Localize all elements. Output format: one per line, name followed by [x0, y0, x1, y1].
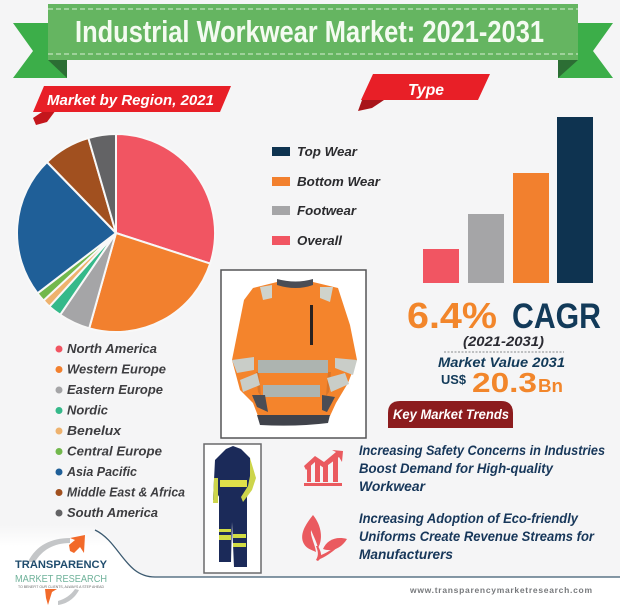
type legend: Footwear [297, 203, 357, 218]
trend 2 text: Uniforms Create Revenue Streams for [359, 528, 595, 544]
region legend: Benelux [67, 423, 122, 438]
trend 2 text [359, 510, 595, 562]
type legend: Bottom Wear [297, 174, 381, 189]
market value stat: US$ [441, 372, 467, 387]
market value stat: Bn [538, 376, 563, 396]
CAGR stat: 6.4% [407, 295, 497, 336]
ribbon heading: type: Type [408, 82, 444, 99]
market value stat: Market Value 2031 [438, 354, 565, 370]
region legend: Western Europe [67, 362, 166, 376]
region legend: Asia Pacific [66, 464, 138, 479]
type legend: Top Wear [297, 144, 358, 159]
key market trends heading: Key Market Trends [393, 406, 509, 422]
CAGR stat [407, 295, 601, 349]
photo: navy coverall with yellow bands [204, 444, 261, 573]
type legend: Overall [297, 233, 342, 248]
footer background [0, 525, 620, 611]
trend 1 text: Workwear [359, 478, 427, 494]
CAGR stat: CAGR [512, 297, 601, 336]
trend 2 text: Manufacturers [359, 546, 453, 562]
website url: www.transparencymarketresearch.com [409, 585, 592, 595]
region legend: Nordic [67, 402, 109, 418]
trend 1 text [359, 442, 605, 494]
region legend [56, 341, 185, 520]
CAGR stat: (2021-2031) [463, 333, 544, 349]
trend 2 text: Increasing Adoption of Eco-friendly [359, 510, 579, 526]
region legend: Eastern Europe [67, 382, 163, 397]
company logo: TO BENEFIT OUR CLIENTS, ALWAYS A STEP AHEAD [18, 584, 104, 589]
footer wave line [95, 530, 620, 577]
type legend [272, 144, 381, 248]
market value stat: 20.3 [472, 367, 537, 398]
market value stat [438, 354, 565, 398]
title banner [13, 4, 613, 78]
icon: leaves [302, 515, 347, 561]
company logo [15, 535, 108, 605]
photo: hi-vis orange sweatshirt [221, 270, 366, 438]
divider dashes [444, 351, 564, 353]
ribbon heading: market by region [33, 86, 231, 125]
region legend: South America [67, 505, 158, 520]
company logo: TRANSPARENCY [15, 559, 108, 571]
key market trends heading [388, 401, 513, 428]
ribbon heading: market by region: Market by Region, 2021 [47, 92, 214, 109]
company logo: MARKET RESEARCH [15, 573, 107, 585]
region legend: Central Europe [67, 444, 162, 458]
ribbon heading: type [358, 74, 490, 111]
region legend: North America [67, 341, 157, 356]
icon: rising chart [304, 450, 343, 486]
region legend: Middle East & Africa [67, 484, 185, 500]
bar chart: type [423, 117, 593, 283]
pie chart: market by region [17, 134, 215, 332]
trend 1 text: Boost Demand for High-quality [359, 460, 554, 476]
